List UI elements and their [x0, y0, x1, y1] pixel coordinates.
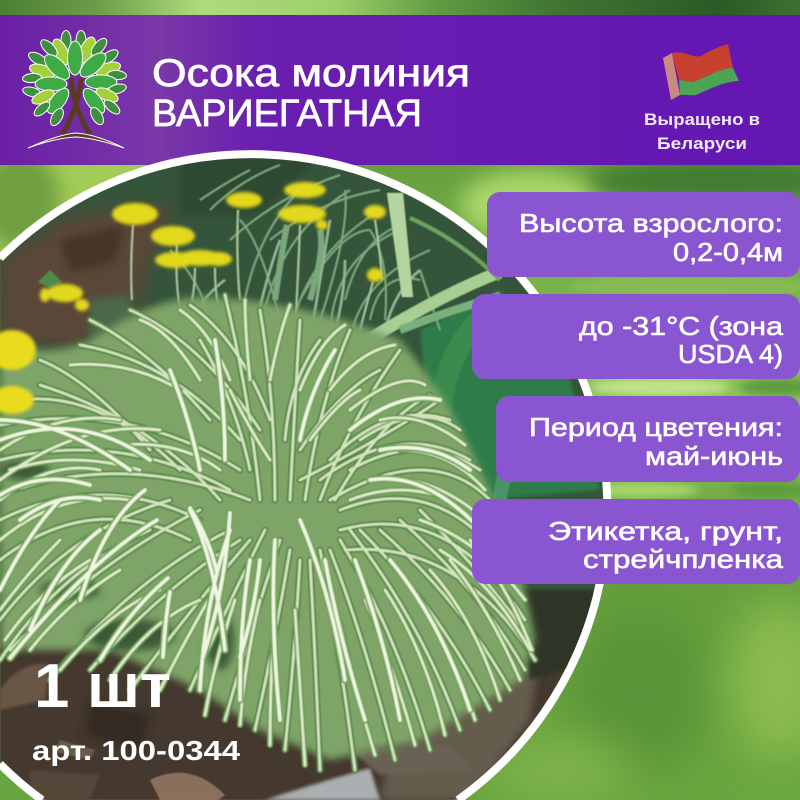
card: mature height: Высота взрослого: — [519, 208, 783, 238]
soil and background foliage — [0, 150, 610, 800]
card: hardiness: USDA 4) — [678, 339, 783, 369]
card: flowering period: Период цветения: — [529, 412, 783, 442]
card: flowering period: май-июнь — [645, 441, 783, 471]
yellow flower stems — [131, 210, 382, 330]
sedge blades: middle layer — [0, 300, 532, 765]
article number: арт. 100-0344 — [32, 735, 240, 766]
card: hardiness: до -31°С (зона — [579, 311, 784, 341]
white circular frame — [0, 154, 607, 800]
small green plant — [38, 270, 62, 288]
card: flowering period — [496, 396, 800, 482]
card: mature height — [487, 192, 800, 277]
icon: flag of Belarus — [663, 44, 739, 100]
photo: variegated sedge in garden — [0, 150, 610, 800]
label: grown in Belarus: Выращено в — [644, 110, 760, 129]
title: ВАРИЕГАТНАЯ — [152, 93, 422, 135]
sedge blades: front layer — [0, 340, 490, 720]
card: hardiness — [472, 294, 800, 379]
tree leaves — [22, 30, 127, 128]
dark gaps under sedge — [0, 460, 234, 670]
card: package contents: стрейчпленка — [583, 544, 784, 574]
sedge mound — [0, 297, 535, 760]
sedge blades: back layer — [0, 295, 535, 770]
quantity label: 1 шт — [34, 652, 171, 721]
tree trunk — [28, 78, 124, 148]
label: grown in Belarus — [644, 110, 760, 153]
card: package contents — [472, 499, 800, 584]
title — [152, 52, 470, 135]
icon: tree logo — [22, 30, 127, 148]
title: Осока молиния — [152, 52, 470, 95]
background grass and lily leaves — [170, 165, 540, 500]
header band — [0, 15, 800, 165]
label: grown in Belarus: Беларуси — [657, 134, 747, 153]
card: package contents: Этикетка, грунт, — [548, 516, 783, 546]
yellow flowers — [40, 182, 386, 311]
yellow flowers in front, left edge — [0, 330, 36, 414]
card: mature height: 0,2-0,4м — [673, 237, 783, 267]
